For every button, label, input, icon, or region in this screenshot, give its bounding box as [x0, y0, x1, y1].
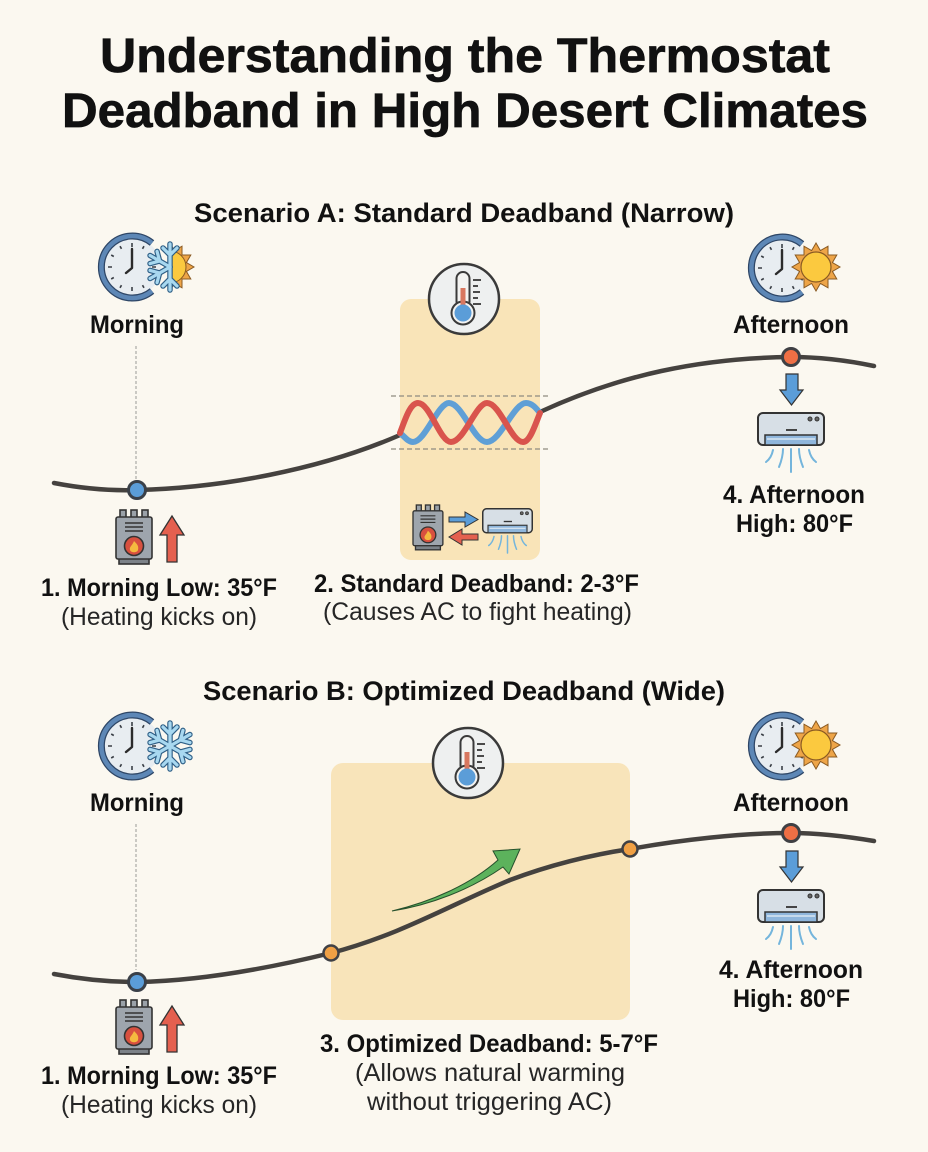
text: step 2 [314, 570, 639, 626]
icon: AC A [758, 413, 824, 472]
dashed line: morning B [135, 824, 137, 970]
label: morning B: Morning [90, 789, 184, 817]
text: step 1 A: (Heating kicks on) [61, 603, 257, 631]
text: step 4 B: High: 80°F [733, 985, 850, 1013]
markers: optimized deadband edges [324, 842, 638, 960]
title: Deadband in High Desert Climates [62, 85, 868, 138]
marker: afternoon high B [782, 824, 800, 842]
deadband limits A [391, 396, 549, 449]
icon: heater and AC exchange [413, 505, 532, 553]
text: step 1 A: 1. Morning Low: 35°F [41, 574, 277, 602]
temperature curve A [54, 357, 874, 490]
icon: morning clock with snowflake B [101, 715, 193, 777]
marker: afternoon high A [782, 348, 800, 366]
text: step 3 [320, 1030, 658, 1116]
icon: afternoon clock with sun B [751, 715, 840, 777]
icon: afternoon clock with sun A [751, 237, 840, 299]
text: step 1 A [41, 574, 277, 631]
text: step 1 B: 1. Morning Low: 35°F [41, 1062, 277, 1090]
icon: thermometer A [429, 264, 499, 334]
icon: thermometer B [433, 728, 503, 798]
icon: morning clock with snowflake and sun [101, 236, 194, 298]
icon: AC B [758, 890, 824, 949]
text: step 4 A: High: 80°F [736, 510, 853, 538]
marker: morning low A [128, 482, 146, 498]
text: step 2: (Causes AC to fight heating) [323, 598, 632, 626]
title [62, 30, 868, 138]
label: afternoon A: Afternoon [733, 311, 849, 339]
text: step 3: 3. Optimized Deadband: 5-7°F [320, 1030, 658, 1058]
text: step 3: without triggering AC) [366, 1088, 612, 1116]
text: step 4 A: 4. Afternoon [723, 481, 865, 509]
text: step 4 B: 4. Afternoon [719, 956, 863, 984]
oscillation waves [400, 403, 540, 442]
panel: standard deadband zone [400, 299, 540, 560]
text: step 4 B [719, 956, 863, 1013]
arrow: cooling down A [780, 374, 803, 405]
label: afternoon B: Afternoon [733, 789, 849, 817]
heading: scenario A: Scenario A: Standard Deadband (Narrow) [194, 198, 734, 228]
marker: morning low B [128, 974, 146, 990]
temperature curve B [54, 833, 874, 982]
title: Understanding the Thermostat [100, 30, 830, 83]
text: step 4 A [723, 481, 865, 538]
text: step 1 B [41, 1062, 277, 1119]
heading: scenario B: Scenario B: Optimized Deadband (Wide) [203, 676, 725, 706]
icon: heater with up arrow B [116, 1000, 184, 1054]
label: morning A: Morning [90, 311, 184, 339]
panel: optimized deadband zone [331, 763, 630, 1020]
text: step 3: (Allows natural warming [355, 1059, 625, 1087]
arrow: natural warming [392, 849, 520, 911]
text: step 1 B: (Heating kicks on) [61, 1091, 257, 1119]
arrow: cooling down B [780, 851, 803, 882]
dashed line: morning A [135, 346, 137, 480]
text: step 2: 2. Standard Deadband: 2-3°F [314, 570, 639, 598]
icon: heater with up arrow A [116, 510, 184, 564]
